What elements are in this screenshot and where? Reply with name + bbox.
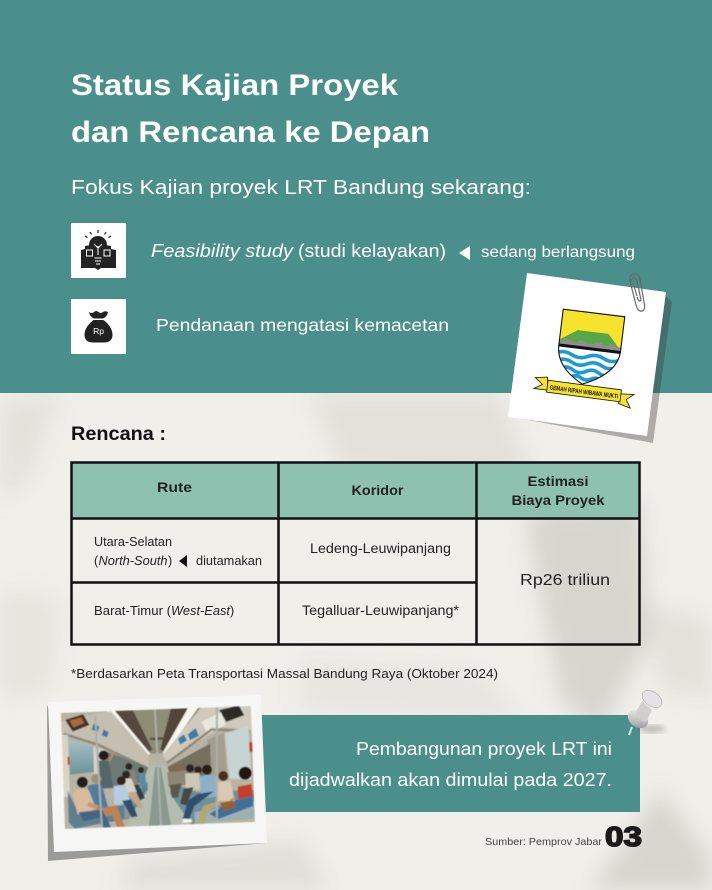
row: west-east: West-East bbox=[171, 604, 231, 618]
ceiling bbox=[132, 708, 200, 754]
row: west-east: Barat-Timur ( bbox=[94, 604, 172, 618]
emblem ribbon with motto bbox=[533, 376, 635, 408]
focus item: funding: Pendanaan mengatasi kemacetan bbox=[156, 315, 449, 335]
status text: sedang berlangsung bbox=[481, 244, 635, 261]
feasibility study text: Feasibility study bbox=[151, 241, 294, 261]
footnote: *Berdasarkan Peta Transportasi Massal Bandung Raya (Oktober 2024) bbox=[71, 667, 498, 681]
row: north-south: diutamakan bbox=[196, 554, 262, 568]
callout: construction schedule: Pembangunan proyek LRT ini bbox=[356, 739, 612, 759]
title: Status Kajian Proyek bbox=[71, 69, 398, 102]
source note: Sumber: Pemprov Jabar bbox=[485, 836, 603, 848]
row: west-east: Tegalluar-Leuwipanjang* bbox=[302, 603, 460, 618]
polaroid photo: LRT interior bbox=[47, 695, 267, 861]
subheading: Fokus Kajian proyek LRT Bandung sekarang: bbox=[71, 177, 531, 199]
row: west-east: ) bbox=[230, 604, 234, 618]
page number: 03 bbox=[605, 821, 642, 852]
icon: paper clip bbox=[630, 274, 645, 311]
icon: money bag bbox=[71, 299, 126, 354]
passengers right bbox=[167, 762, 254, 825]
table header: Rute bbox=[157, 479, 192, 495]
feasibility study text bbox=[151, 241, 446, 261]
row: west-east bbox=[94, 603, 460, 618]
project cost: Rp26 triliun bbox=[520, 572, 610, 589]
callout: construction schedule bbox=[258, 715, 640, 812]
icon: book and light bulb bbox=[71, 223, 126, 278]
city emblem shield bbox=[558, 308, 626, 384]
row: north-south: Ledeng-Leuwipanjang bbox=[310, 541, 451, 556]
upper walls and ads bbox=[62, 710, 148, 766]
poles bbox=[95, 707, 221, 828]
table header: Biaya Proyek bbox=[512, 492, 605, 508]
passengers left bbox=[71, 749, 148, 829]
table header: Koridor bbox=[352, 482, 404, 498]
background: paper texture bbox=[0, 393, 712, 890]
row: north-south: North-South bbox=[98, 554, 168, 568]
seats bbox=[67, 782, 149, 829]
row: north-south: ( bbox=[94, 554, 99, 568]
title bbox=[71, 69, 430, 149]
row: north-south: Utara-Selatan bbox=[94, 535, 172, 549]
icon: push pin bbox=[624, 687, 665, 735]
row: north-south bbox=[94, 535, 451, 568]
arrow: in progress marker bbox=[459, 246, 470, 260]
far carriage walls bbox=[106, 750, 150, 787]
row: north-south: ) bbox=[168, 554, 172, 568]
header band bbox=[0, 0, 712, 393]
plan heading: Rencana : bbox=[71, 424, 166, 445]
feasibility study text: (studi kelayakan) bbox=[298, 241, 446, 261]
note card with city emblem bbox=[508, 273, 672, 443]
icon: money bag: Rp bbox=[93, 326, 104, 336]
table header: Estimasi bbox=[528, 473, 588, 489]
callout: construction schedule: dijadwalkan akan dimulai pada 2027. bbox=[289, 770, 612, 790]
title: dan Rencana ke Depan bbox=[71, 116, 430, 149]
floor bbox=[125, 764, 189, 827]
table: routes and cost bbox=[71, 462, 640, 645]
emblem ribbon with motto: GEMAH RIPAH WIBAWA MUKTI bbox=[549, 385, 619, 400]
windows bbox=[69, 739, 94, 775]
table header bbox=[157, 473, 605, 508]
